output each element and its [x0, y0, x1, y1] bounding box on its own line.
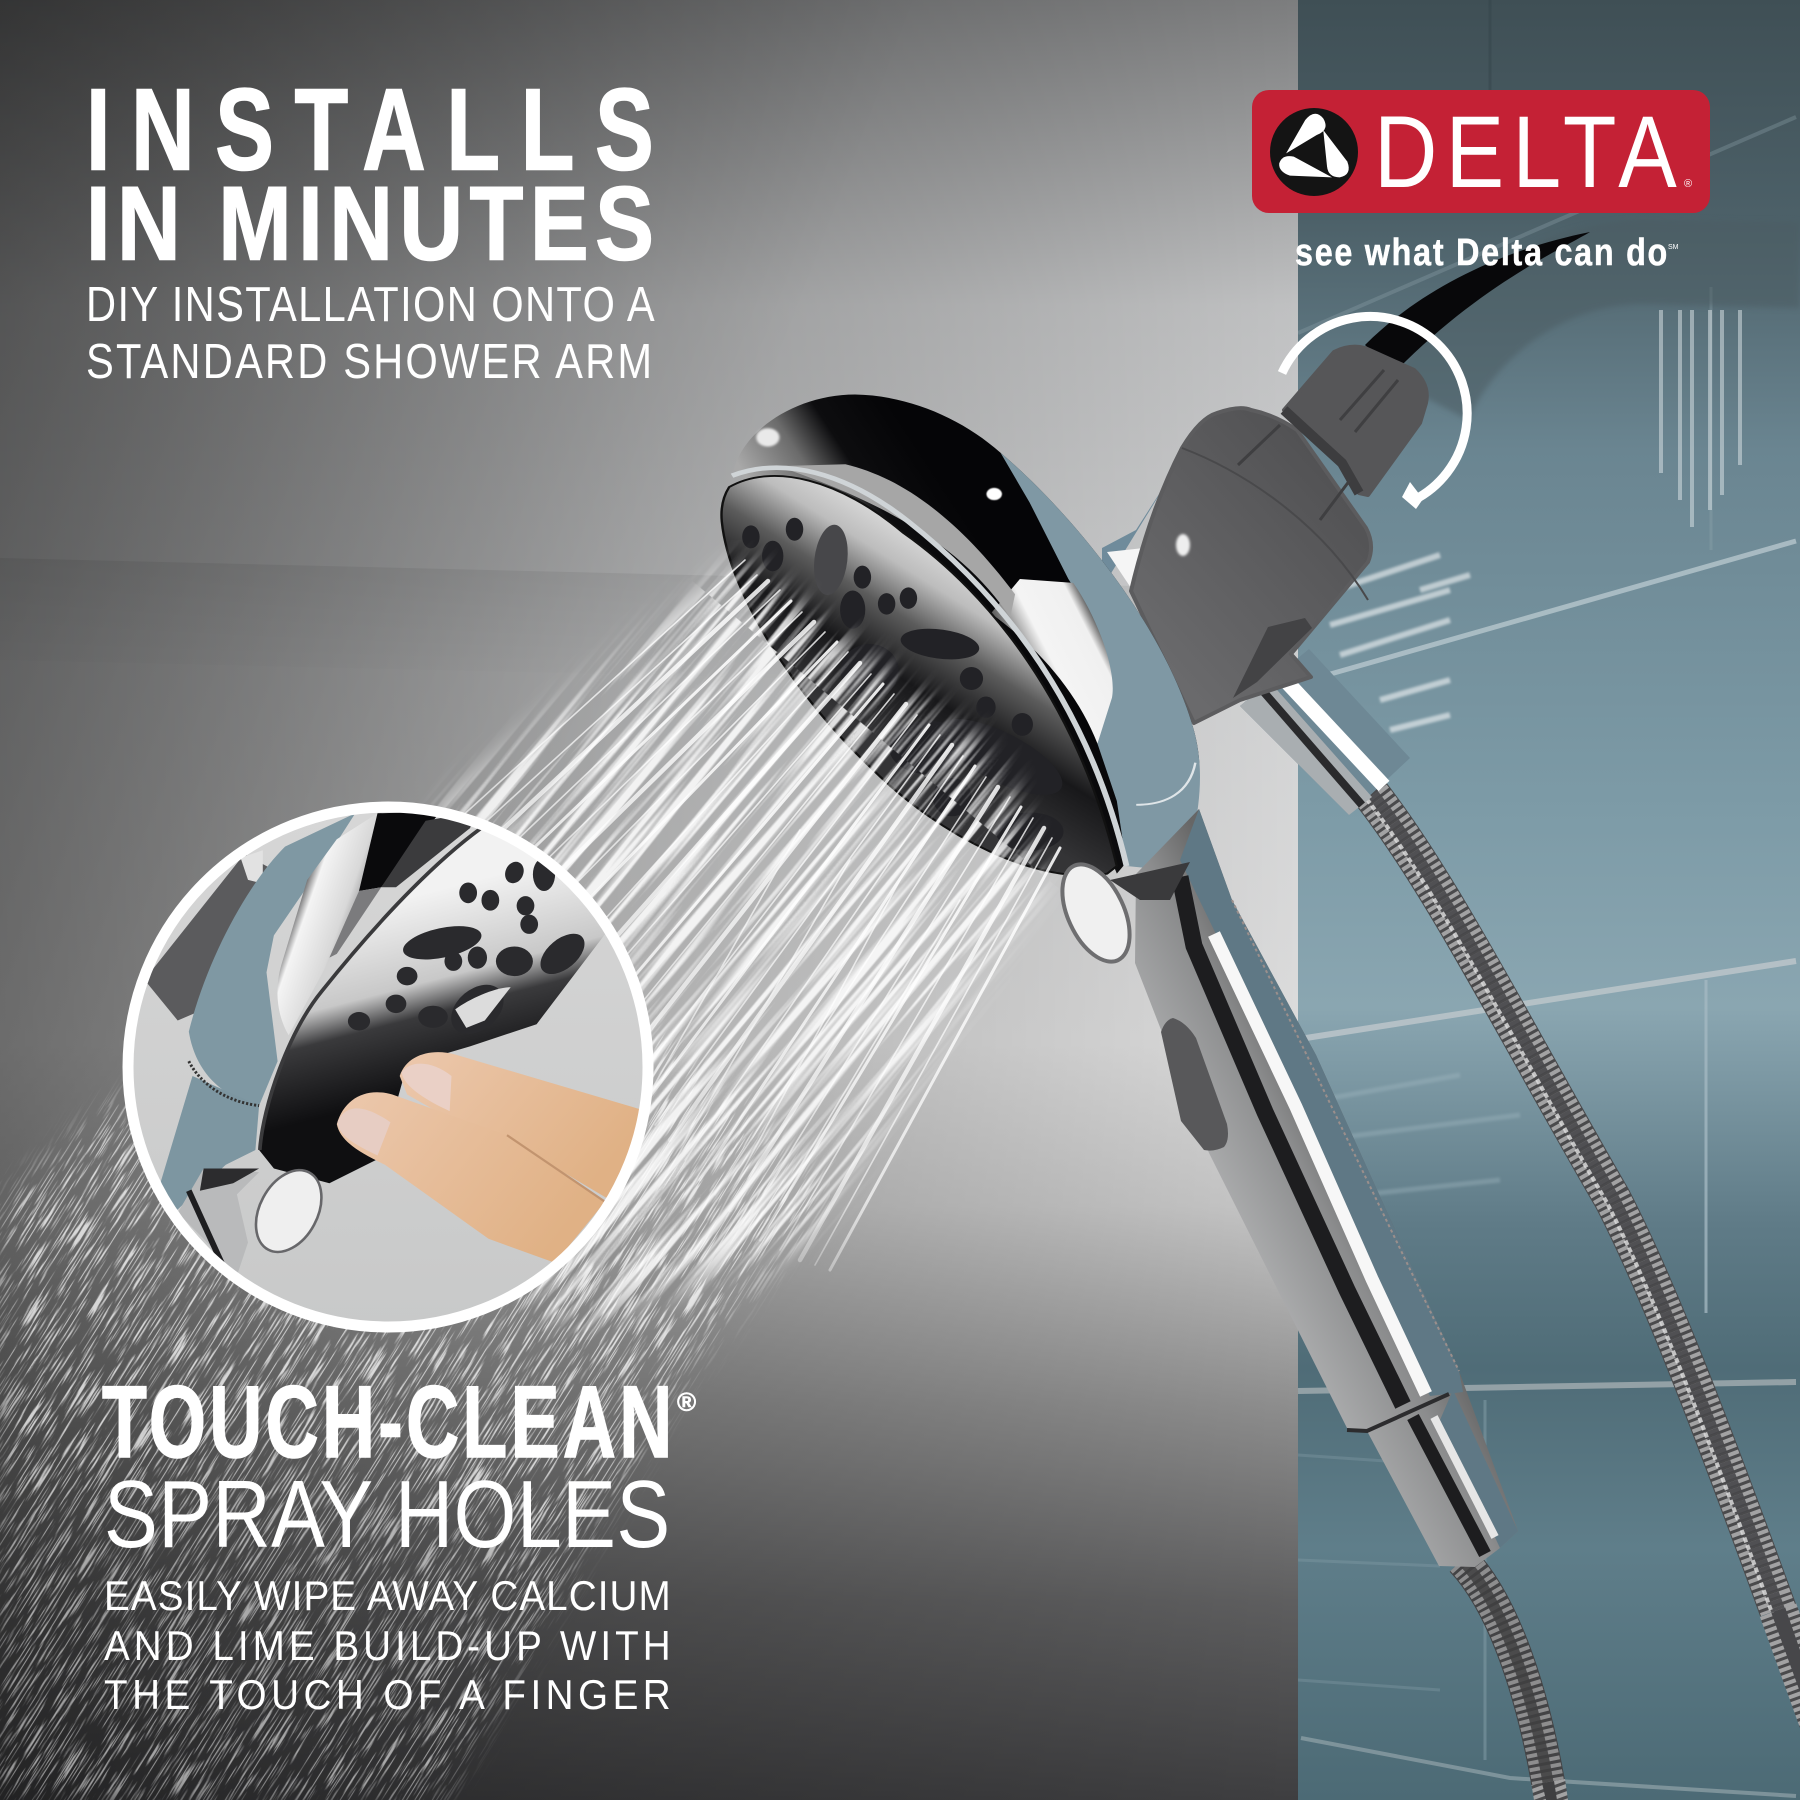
heading: installs in minutes: INSTALLS [86, 65, 654, 194]
rotation arrow [1282, 316, 1467, 509]
shower head: dome, rim and spray face [722, 395, 1200, 875]
text: installation description [86, 277, 655, 389]
dome body [734, 395, 1199, 874]
heading: touch-clean spray holes: ® [677, 1387, 696, 1417]
text: touch-clean description [104, 1571, 671, 1718]
text: installation description: STANDARD SHOWER ARM [86, 334, 652, 389]
logo: Delta red badge [1252, 90, 1710, 213]
logo: black circle mark [1270, 108, 1358, 196]
inset: fingers [400, 1052, 640, 1198]
text: touch-clean description: THE TOUCH OF A FINGER [104, 1670, 671, 1718]
spray holes [742, 518, 1077, 851]
text: touch-clean description: EASILY WIPE AWAY CALCIUM [104, 1571, 671, 1619]
mount: grey connector [1102, 347, 1427, 723]
text: installation description: DIY INSTALLATION ONTO A [86, 277, 655, 332]
heading: installs in minutes [86, 65, 654, 282]
inset circle: finger wiping spray holes [128, 807, 648, 1327]
text: touch-clean description: AND LIME BUILD-UP WITH [104, 1621, 671, 1669]
hook: chrome loop [1049, 854, 1143, 972]
tagline: SM [1668, 244, 1679, 251]
chrome arm holder [1240, 649, 1410, 815]
inset: chrome handle and loop [178, 1168, 259, 1276]
hose: lower metal hose [1462, 1560, 1568, 1800]
inset: spray face [259, 828, 607, 1183]
handle: chrome hand shower grip [1110, 809, 1518, 1567]
spray: distant water streaks [0, 1000, 830, 1800]
heading: touch-clean spray holes: TOUCH-CLEAN [102, 1365, 672, 1479]
chrome rim band [1001, 453, 1200, 870]
inset: blue chrome dome [189, 813, 355, 1106]
heading: installs in minutes: IN MINUTES [86, 166, 654, 282]
spray: water streaks from shower head [430, 546, 1062, 1340]
inset: holes [348, 861, 584, 1030]
inset: grey mount [148, 855, 268, 1020]
logo: wordmark: DELTA [1374, 96, 1677, 210]
handle: blue-grey side panel [1180, 809, 1463, 1396]
spray face [722, 476, 1117, 875]
background: teal tile wall [1298, 0, 1800, 1800]
background: shower arm reflection [1404, 262, 1798, 418]
handle: chrome highlights [1180, 877, 1403, 1405]
handle: grey spray button [1161, 1018, 1228, 1151]
inset: chrome reflection [278, 820, 368, 1035]
tagline: see what Delta can do [1295, 232, 1667, 274]
hose: upper metal hose [1362, 790, 1800, 1728]
logo: Delta red badge: ® [1684, 178, 1692, 190]
heading: touch-clean spray holes: SPRAY HOLES [104, 1460, 670, 1568]
shower arm: black chrome tube [1365, 232, 1590, 372]
heading: touch-clean spray holes [102, 1365, 696, 1568]
white reflection [991, 579, 1113, 744]
background: grey studio gradient [0, 0, 1300, 1800]
